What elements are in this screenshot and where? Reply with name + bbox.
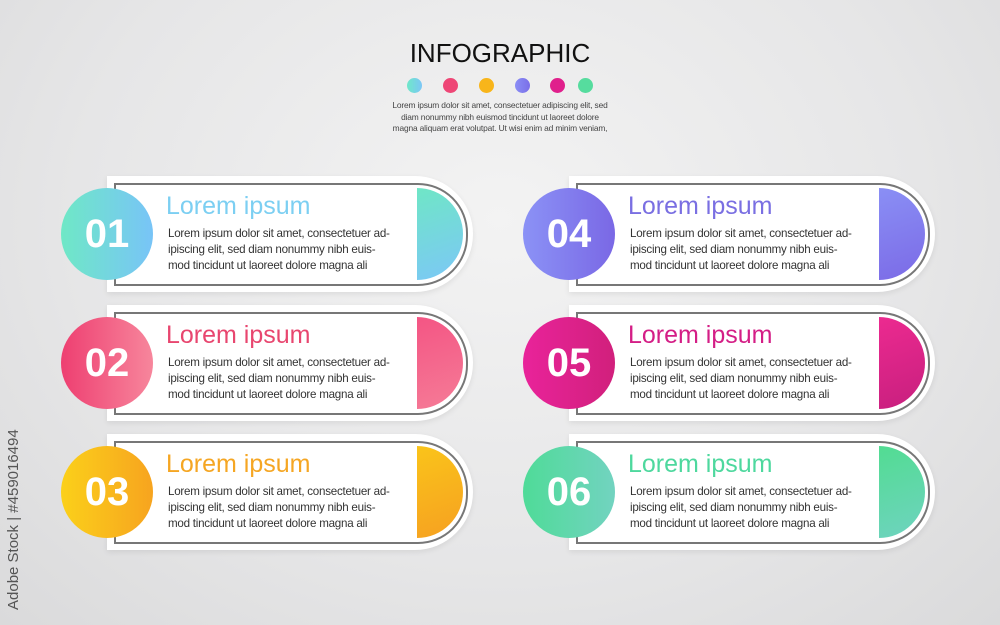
- panel: 02: [61, 305, 474, 424]
- panel: 04: Lorem ipsum dolor sit amet, consectetuer ad-: [630, 227, 852, 240]
- panel: 01: 01: [85, 212, 129, 256]
- panel: 06: Lorem ipsum dolor sit amet, consectetuer ad-: [630, 485, 852, 498]
- panel: 06: [523, 434, 935, 552]
- panel: 01: [61, 176, 474, 294]
- panel: 01: ipiscing elit, sed diam nonummy nibh euis-: [168, 243, 375, 256]
- panel: 05: Lorem ipsum dolor sit amet, consectetuer ad-: [630, 356, 852, 369]
- panel: 01: Lorem ipsum dolor sit amet, consectetuer ad-: [168, 227, 390, 240]
- panel: 01: Lorem ipsum: [166, 192, 310, 220]
- panel: 02: Lorem ipsum dolor sit amet, consectetuer ad-: [168, 356, 390, 369]
- panel: 04: [523, 176, 936, 294]
- subtitle text: Lorem ipsum dolor sit amet, consectetuer adipiscing elit, sed: [392, 100, 608, 110]
- panel: 06: 06: [547, 470, 591, 514]
- panel: 03: [61, 434, 474, 552]
- panel: 05: 05: [547, 341, 591, 385]
- panel: 04: 04: [547, 212, 591, 256]
- panel: 06: mod tincidunt ut laoreet dolore magna ali: [630, 517, 829, 530]
- panel: 04: mod tincidunt ut laoreet dolore magna ali: [630, 259, 829, 272]
- panel: 06: Lorem ipsum: [628, 450, 772, 478]
- panel: 02: mod tincidunt ut laoreet dolore magna ali: [168, 388, 367, 401]
- panel: 03: Lorem ipsum dolor sit amet, consectetuer ad-: [168, 485, 390, 498]
- panel: 02: Lorem ipsum: [166, 321, 310, 349]
- panel: 02: 02: [85, 341, 129, 385]
- subtitle text: [392, 100, 608, 133]
- panel: 02: ipiscing elit, sed diam nonummy nibh euis-: [168, 372, 375, 385]
- subtitle text: diam nonummy nibh euismod tincidunt ut laoreet dolore: [401, 112, 599, 122]
- color dots: [407, 78, 593, 93]
- watermark vertical text: Adobe Stock | #459016494: [5, 429, 22, 610]
- panel: 03: mod tincidunt ut laoreet dolore magna ali: [168, 517, 367, 530]
- panel: 03: 03: [85, 470, 129, 514]
- panel: 05: ipiscing elit, sed diam nonummy nibh euis-: [630, 372, 837, 385]
- panel: 01: mod tincidunt ut laoreet dolore magna ali: [168, 259, 367, 272]
- panel: 03: Lorem ipsum: [166, 450, 310, 478]
- panel: 04: Lorem ipsum: [628, 192, 772, 220]
- subtitle text: magna aliquam erat volutpat. Ut wisi enim ad minim veniam,: [393, 123, 607, 133]
- panel: 06: ipiscing elit, sed diam nonummy nibh euis-: [630, 501, 837, 514]
- title: INFOGRAPHIC: [410, 38, 590, 68]
- panel: 03: ipiscing elit, sed diam nonummy nibh euis-: [168, 501, 375, 514]
- panel: 05: [523, 305, 936, 424]
- panel: 04: ipiscing elit, sed diam nonummy nibh euis-: [630, 243, 837, 256]
- panel: 05: Lorem ipsum: [628, 321, 772, 349]
- panel: 05: mod tincidunt ut laoreet dolore magna ali: [630, 388, 829, 401]
